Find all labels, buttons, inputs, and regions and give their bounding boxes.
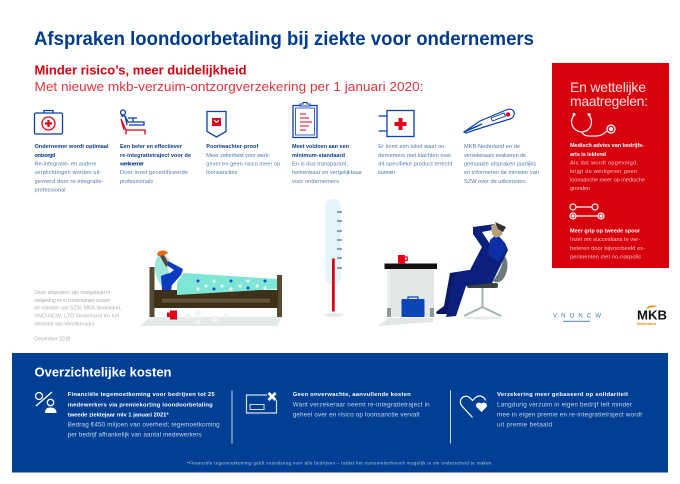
- panel: wettelijke maatregelen: arts is leidend: [570, 152, 606, 158]
- note: afspraken: VNO-NCW, LTO Nederland en het: [34, 313, 120, 319]
- panel: overzichtelijke kosten: tweede ziektejaar mlv 1 januari 2021*: [68, 412, 169, 418]
- note: afspraken: Deze afspraken zijn vastgelegd in: [34, 290, 110, 296]
- column: loket: dit specifieke product terecht: [378, 162, 453, 168]
- note: afspraken: wetgeving en in convenanten tussen: [34, 298, 110, 304]
- subtitle: [34, 62, 424, 94]
- heading: [570, 79, 648, 109]
- panel: overzichtelijke kosten: Langdurig verzuim in eigen bedrijf telt minder: [497, 401, 632, 408]
- icon: percent person: [36, 392, 56, 413]
- logo: MKB-Nederland: [637, 305, 667, 326]
- icon: red mug: [398, 255, 407, 264]
- panel: overzichtelijke kosten: Geen onverwachte, aanvullende kosten: [293, 392, 411, 398]
- panel: wettelijke maatregelen: loonsanctie meer op medische: [570, 178, 645, 184]
- heading: Overzichtelijke kosten: [34, 364, 172, 380]
- panel: wettelijke maatregelen: krijgt de werkgever geen: [570, 169, 637, 175]
- logo: VNO-NCW: VNONCW: [553, 314, 601, 320]
- icon: sign with cross: [378, 110, 414, 136]
- column: evaluatie: MKB-Nederland en de: [464, 144, 520, 150]
- column: ontzorgd: Ondernemer wordt optimaal: [34, 144, 109, 150]
- heading: maatregelen:: [570, 93, 648, 109]
- panel: overzichtelijke kosten: Want verzekeraar neemt re-integratietraject in: [293, 401, 430, 408]
- panel: overzichtelijke kosten: geheel over en risico op loonsanctie vervalt: [293, 411, 420, 418]
- column: loket: dernemers met klachten over: [378, 153, 451, 159]
- subtitle: Minder risico’s, meer duidelijkheid: [34, 62, 247, 78]
- column: loket: kunnen: [378, 170, 395, 176]
- column: poortwachter: [206, 112, 280, 176]
- icon: first aid case: [34, 110, 62, 134]
- panel: overzichtelijke kosten: Verzekering meer gebaseerd op solidariteit: [497, 392, 628, 398]
- illustration: sick person in bed: [140, 250, 282, 326]
- column: evaluatie: gemaakte afspraken jaarlijks: [464, 162, 536, 168]
- panel: overzichtelijke kosten: Financiële tegemoetkoming voor bedrijven tot 25: [68, 392, 215, 398]
- icon: two tracks: [570, 204, 604, 219]
- note: afspraken: de minister van SZW, MKB-Nederland,: [34, 306, 121, 312]
- panel: wettelijke maatregelen: Meer grip op tweede spoor: [570, 228, 641, 234]
- logo: MKB-Nederland: Nederland: [637, 321, 657, 326]
- column: minimum-standaard: En is dus transparant,: [292, 162, 348, 168]
- column: re-integratietraject: Door inzet gecertificeerde: [120, 170, 188, 176]
- column: re-integratietraject: werknemer: [119, 162, 145, 168]
- icon: briefcase: [402, 297, 424, 317]
- column: re-integratietraject: professionals: [120, 179, 153, 185]
- icon: seated person: [120, 110, 145, 134]
- panel: wettelijke maatregelen: [552, 63, 669, 268]
- panel: wettelijke maatregelen: perimenten met no-riskpolis: [570, 254, 641, 260]
- column: minimum-standaard: voor ondernemers: [292, 179, 339, 185]
- panel: wettelijke maatregelen: Medisch advies van bedrijfs-: [570, 143, 644, 149]
- subtitle: Met nieuwe mkb-verzuim-ontzorgverzekering per 1 januari 2020:: [34, 79, 424, 94]
- icon: red mug: [167, 310, 177, 320]
- footnote: *Financiële tegemoetkoming geldt vooralsnog voor alle bedrijven – totdat het systeemtechnisch mogelijk is om onderscheid te maken.: [187, 460, 493, 466]
- panel: overzichtelijke kosten: Bedrag €450 miljoen van overheid; tegemoetkoming: [68, 421, 220, 428]
- panel: overzichtelijke kosten: uit premie betaald: [497, 421, 552, 428]
- illustration: large thermometer: [324, 199, 343, 317]
- panel: overzichtelijke kosten: medewerkers via premiekorting loondoorbetaling: [68, 402, 213, 408]
- note: afspraken: [34, 290, 121, 342]
- column: evaluatie: SZW over de uitkomsten.: [464, 179, 527, 185]
- column: re-integratietraject: [119, 110, 191, 185]
- column: evaluatie: en informeren de minister van: [464, 170, 539, 176]
- panel: overzichtelijke kosten: [12, 353, 668, 472]
- icon: thermometer: [464, 109, 514, 133]
- note: afspraken: December 2018: [34, 336, 70, 342]
- column: poortwachter: Meer zekerheid voor werk-: [206, 153, 270, 159]
- column: ontzorgd: gevoerd door re-integratie-: [34, 179, 104, 185]
- icon: clipboard: [293, 102, 317, 138]
- column: minimum-standaard: herkenbaar en vergelijkbaar: [292, 170, 362, 176]
- icon: cancelled bill: [246, 393, 276, 413]
- panel: wettelijke maatregelen: beteren door bijvoorbeeld ex-: [570, 246, 645, 252]
- column: poortwachter: loonsancties: [206, 170, 238, 176]
- illustration: desk: [378, 255, 437, 326]
- column: ontzorgd: professional: [34, 188, 66, 194]
- column: poortwachter: Poortwachter-proof: [206, 144, 258, 150]
- column: poortwachter: gever en geen risico meer op: [206, 162, 280, 168]
- heading: En wettelijke: [570, 79, 646, 95]
- panel: wettelijke maatregelen: gronden: [570, 186, 590, 192]
- illustration: stressed man in chair: [436, 222, 508, 320]
- column: minimum-standaard: minimum-standaard: [292, 153, 345, 159]
- column: minimum-standaard: Meet voldoen aan een: [292, 144, 350, 150]
- note: afspraken: Verbond van Verzekeraars: [34, 321, 95, 327]
- column: loket: Er komt een loket waar on-: [378, 144, 446, 150]
- icon: hearts: [460, 396, 487, 418]
- icon: stethoscope: [572, 114, 615, 136]
- panel: overzichtelijke kosten: per bedrijf afhankelijk van aantal medewerkers: [68, 431, 202, 438]
- column: ontzorgd: [34, 110, 109, 194]
- column: ontzorgd: Re-integratie- en andere: [34, 162, 96, 168]
- column: ontzorgd: verplichtingen worden uit-: [34, 170, 102, 176]
- icon: shield: [207, 112, 226, 137]
- panel: wettelijke maatregelen: Inzet om succeskans te ver-: [570, 237, 640, 243]
- column: evaluatie: verzekeraars evalueren de: [464, 153, 526, 159]
- column: re-integratietraject: re-integratietraject voor de: [120, 153, 191, 159]
- column: loket: [378, 110, 453, 176]
- title: Afspraken loondoorbetaling bij ziekte voor ondernemers: [34, 28, 534, 50]
- panel: overzichtelijke kosten: mee in eigen premie en re-integratietraject wordt: [497, 411, 642, 418]
- logo: MKB-Nederland: MKB: [637, 308, 667, 322]
- column: re-integratietraject: Een beter en effectiever: [120, 144, 183, 150]
- panel: wettelijke maatregelen: Als dat wordt opgevolgd,: [570, 160, 638, 166]
- column: evaluatie: [464, 109, 539, 185]
- column: ontzorgd: ontzorgd: [34, 153, 56, 159]
- column: minimum-standaard: [292, 102, 362, 185]
